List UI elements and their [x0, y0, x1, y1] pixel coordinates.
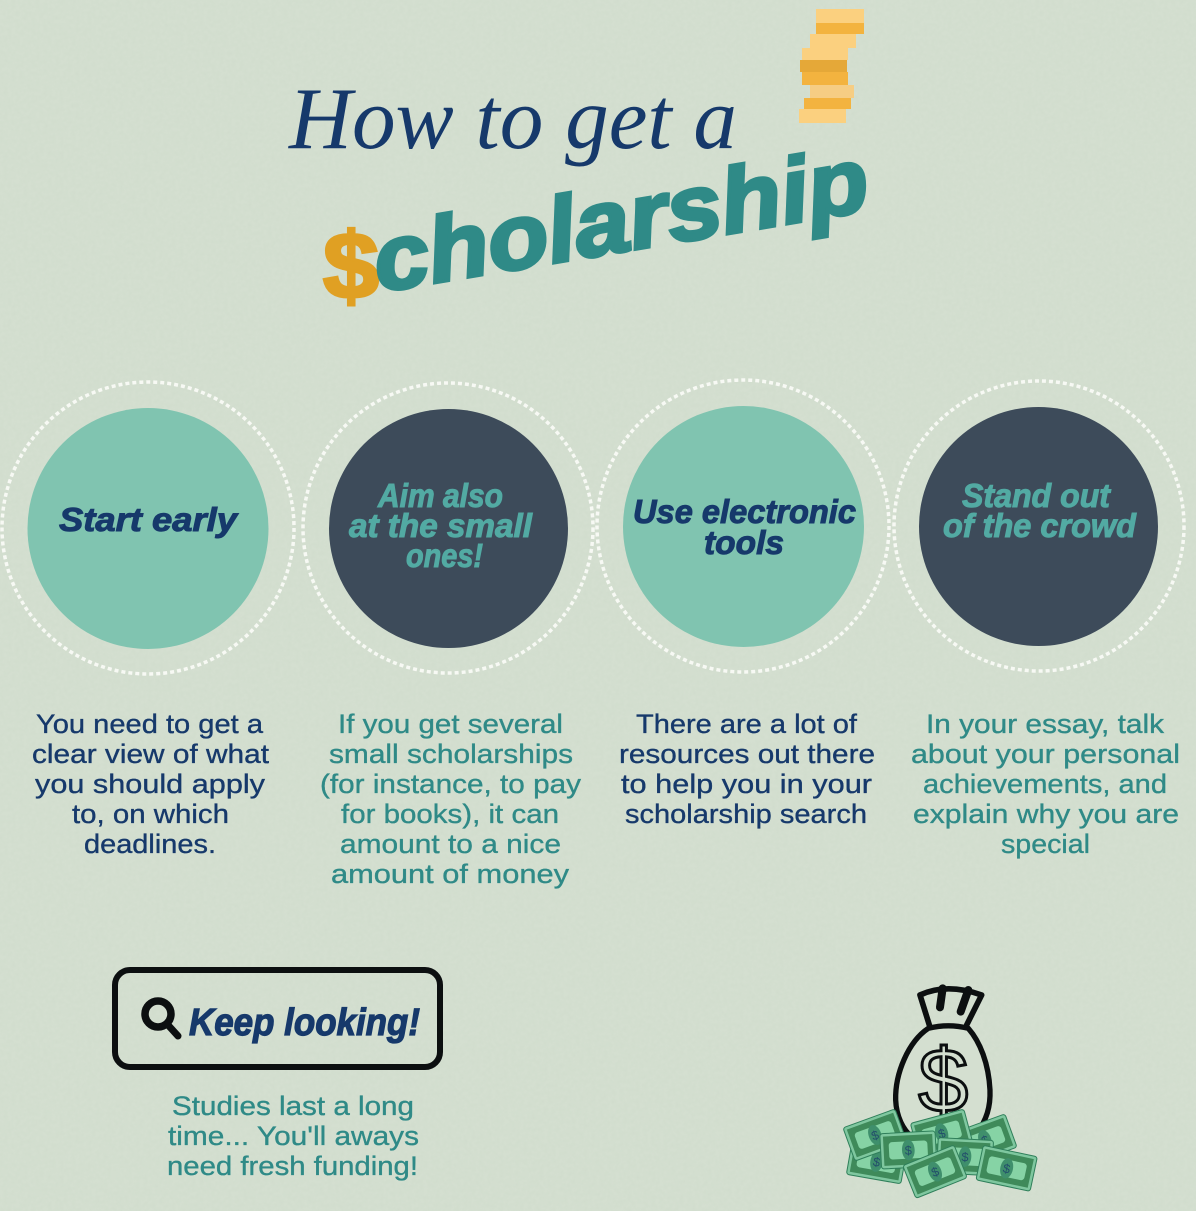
text block: stand out description: explain why you are [913, 799, 1179, 829]
panel: stand out of the crowd [894, 381, 1184, 671]
text block: start early description: You need to get a [36, 709, 264, 739]
heading: stand out [943, 477, 1137, 544]
heading: electronic tools: tools [704, 524, 784, 561]
search box: keep looking [115, 970, 440, 1067]
text block: small scholarships description: small scholarships [329, 739, 573, 769]
title [288, 71, 875, 318]
text block: small scholarships description: for books), it can [341, 799, 559, 829]
text block: keep looking description: time... You'll aways [168, 1121, 419, 1151]
text block: small scholarships description [320, 709, 582, 889]
text block: small scholarships description: amount to a nice [340, 829, 561, 859]
heading: aim also: ones! [406, 537, 483, 574]
text block: stand out description: achievements, and [923, 769, 1167, 799]
title line: How to get a: How to get a [288, 71, 737, 168]
text block: start early description: to, on which [72, 799, 229, 829]
heading: electronic tools: Use electronic [633, 493, 856, 530]
heading: stand out: of the crowd [943, 507, 1137, 544]
icon: stack of coins [799, 9, 864, 123]
text block: small scholarships description: amount of money [331, 859, 570, 889]
circle: aim also [329, 409, 568, 648]
text block: start early description: clear view of what [32, 739, 270, 769]
heading: aim also: at the small [349, 507, 533, 544]
banknotes [843, 1109, 1037, 1198]
panel: start early [2, 382, 294, 674]
heading: stand out: Stand out [962, 477, 1112, 514]
text block: electronic tools description [619, 709, 875, 829]
icon: money bag with banknotes [843, 988, 1037, 1198]
heading: keep looking: Keep looking! [189, 1002, 420, 1044]
heading: aim also [349, 477, 533, 574]
text block: stand out description [911, 709, 1180, 859]
title word: scholarship: cholarship [365, 129, 875, 312]
text block: keep looking description [167, 1091, 419, 1181]
money bag [896, 988, 990, 1137]
heading: start early: Start early [59, 501, 239, 538]
text block: stand out description: about your personal [911, 739, 1180, 769]
panel: aim also at the small ones [303, 383, 593, 673]
text block: stand out description: In your essay, talk [926, 709, 1165, 739]
circle: start early [28, 408, 268, 649]
text block: keep looking description: need fresh funding! [167, 1151, 418, 1181]
text block: electronic tools description: resources out there [619, 739, 875, 769]
text block: electronic tools description: There are a lot of [636, 709, 858, 739]
money bag: $ [918, 1032, 968, 1132]
text block: small scholarships description: (for instance, to pay [320, 769, 582, 799]
text block: start early description [32, 709, 270, 859]
text block: electronic tools description: to help you in your [621, 769, 872, 799]
text block: electronic tools description: scholarship search [625, 799, 867, 829]
icon: magnifying glass [145, 1001, 178, 1036]
circle: stand out [919, 407, 1158, 646]
heading: aim also: Aim also [377, 477, 503, 514]
circle: electronic tools [623, 406, 864, 647]
text block: start early description: you should apply [35, 769, 266, 799]
panel: use electronic tools [597, 380, 889, 672]
text block: keep looking description: Studies last a long [172, 1091, 414, 1121]
heading: electronic tools [633, 493, 856, 561]
text block: start early description: deadlines. [84, 829, 216, 859]
text block: stand out description: special [1001, 829, 1090, 859]
title dollar sign: $ [323, 213, 379, 318]
text block: small scholarships description: If you get several [338, 709, 563, 739]
